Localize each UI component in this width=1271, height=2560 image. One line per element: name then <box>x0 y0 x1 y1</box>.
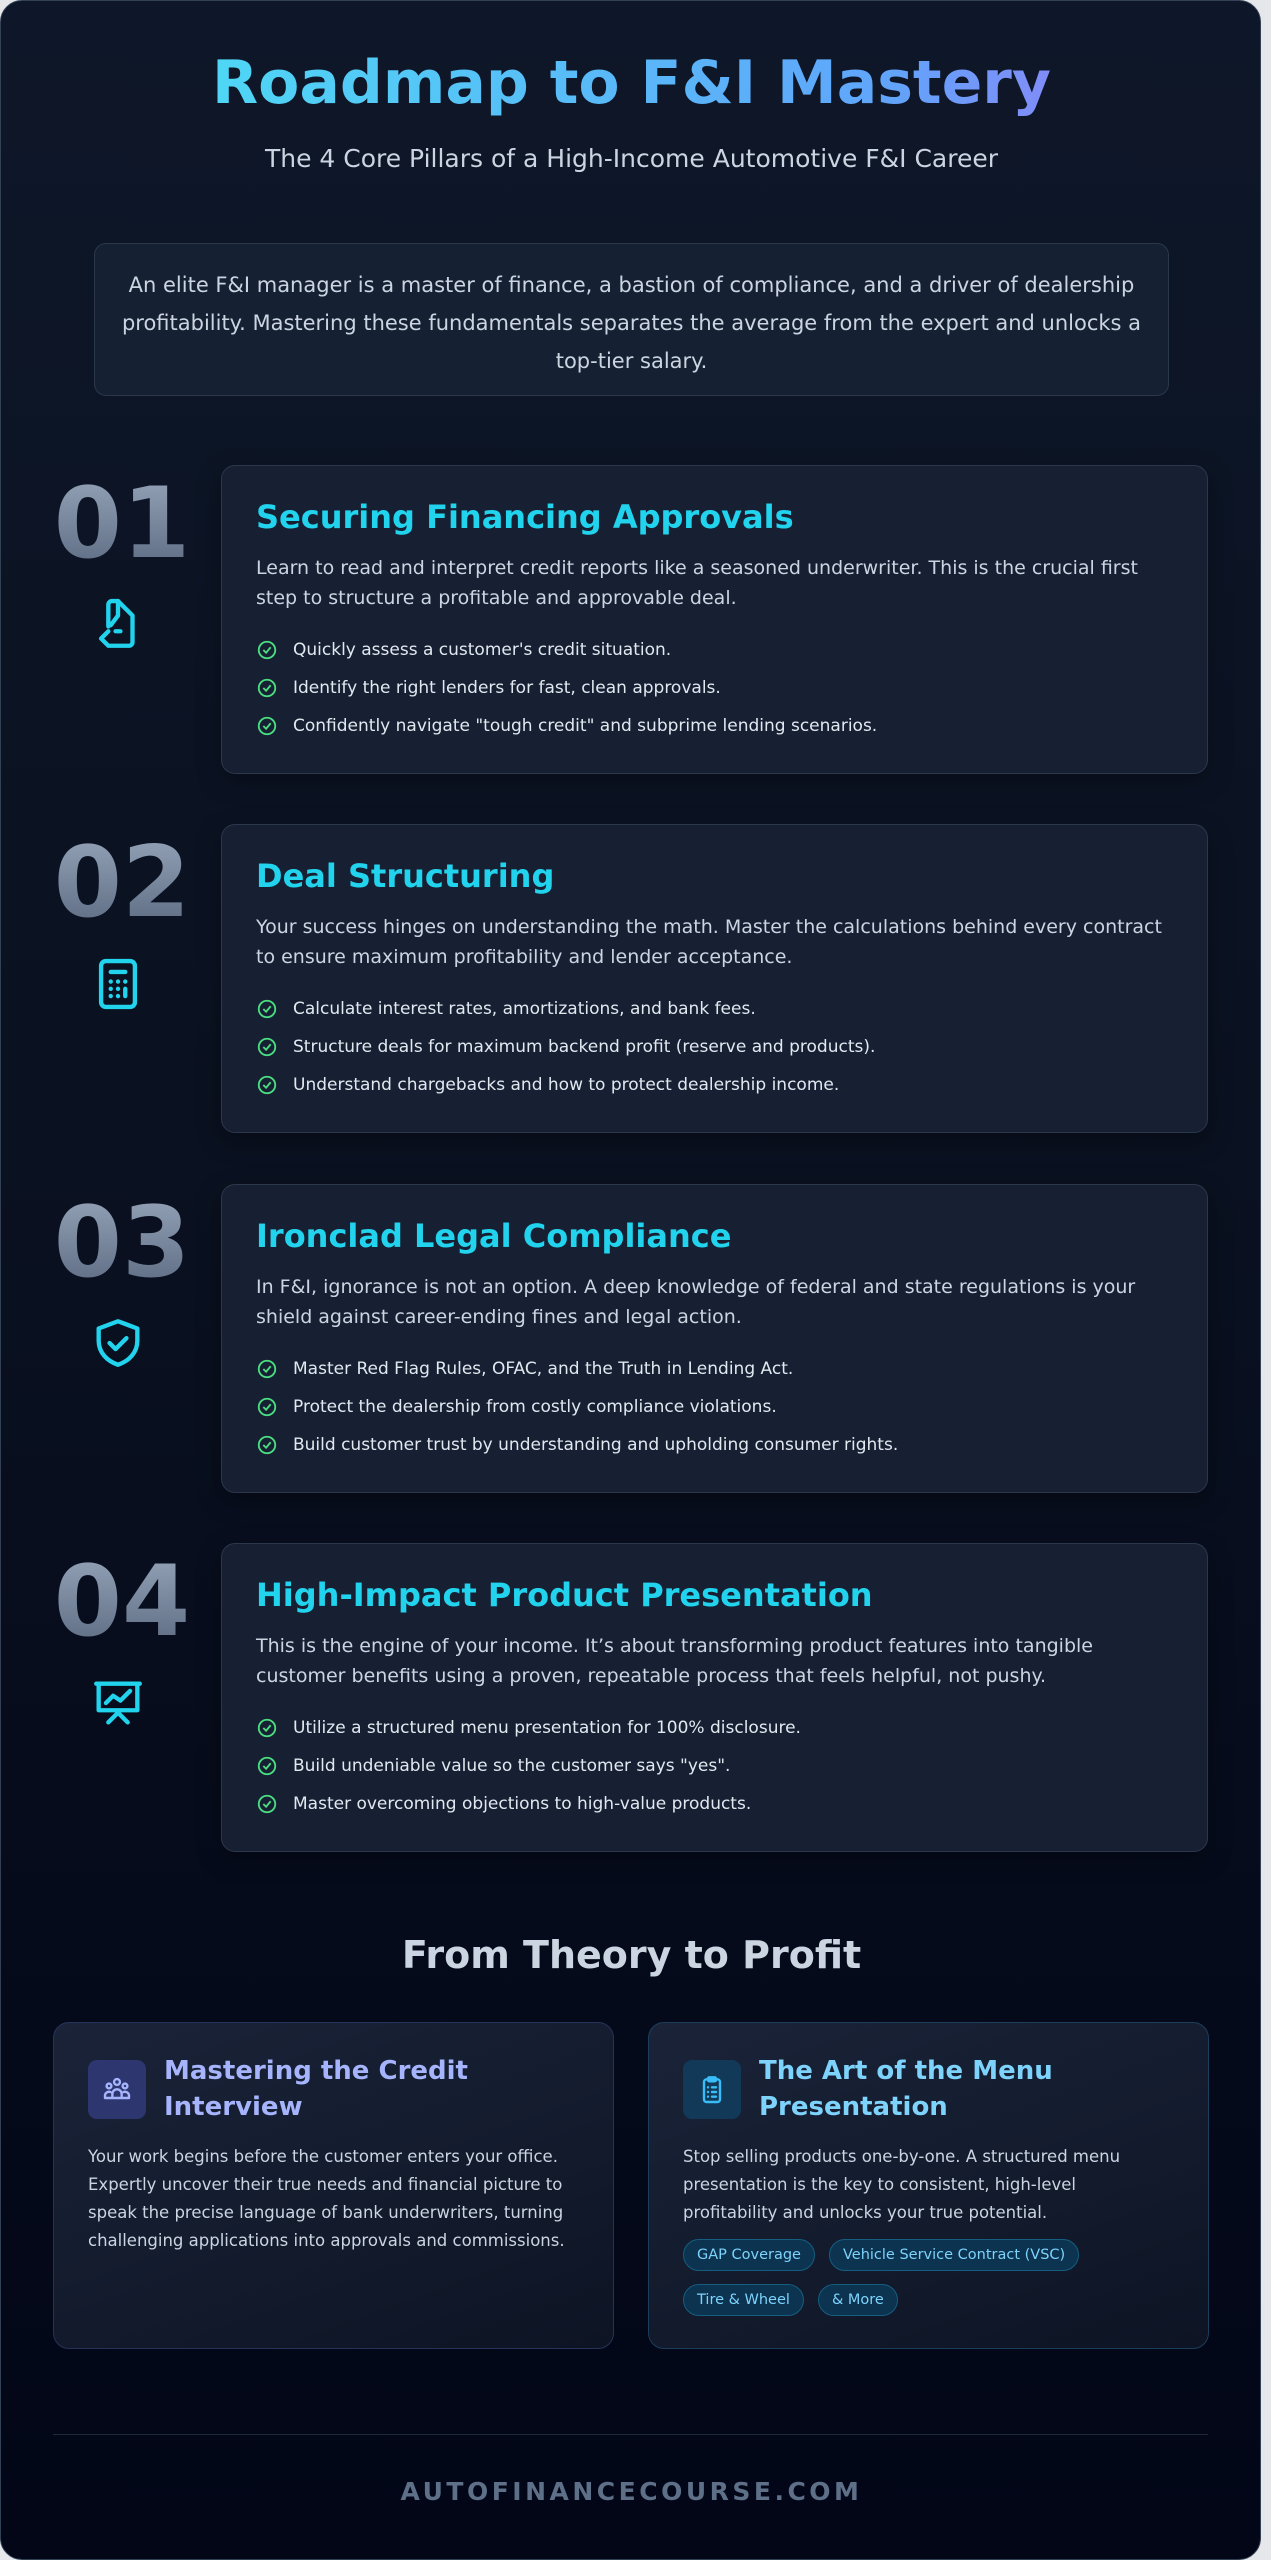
panel: high-impact product presentation: Utilize a structured menu presentation for 100% disclosure. <box>293 1718 801 1738</box>
footer: website: AUTOFINANCECOURSE.COM <box>401 2477 862 2506</box>
number 03: 03 <box>54 1186 190 1300</box>
panel: securing financing approvals: Learn to read and interpret credit reports like a seasoned underwriter. This is the crucial first step to structure a profitable and approvable deal. <box>256 557 1138 609</box>
panel: deal structuring: Structure deals for maximum backend profit (reserve and products). <box>293 1037 875 1057</box>
panel: securing financing approvals <box>221 465 1208 774</box>
panel: ironclad legal compliance: In F&I, ignorance is not an option. A deep knowledge of federal and state regulations is your shield against career-ending fines and legal action. <box>256 1276 1135 1328</box>
product tags: Tire & Wheel <box>697 2292 790 2308</box>
panel: ironclad legal compliance: Ironclad Legal Compliance <box>256 1217 731 1255</box>
number 01: 01 <box>54 467 190 581</box>
panel: high-impact product presentation: High-Impact Product Presentation <box>256 1576 873 1614</box>
panel: securing financing approvals: Securing Financing Approvals <box>256 498 794 536</box>
product tags: & More <box>832 2292 884 2308</box>
panel: mastering the credit interview: Mastering the Credit Interview <box>164 2056 468 2122</box>
panel: mastering the credit interview <box>53 2022 614 2349</box>
number 04: 04 <box>54 1545 190 1659</box>
title: Roadmap to F&I Mastery <box>212 48 1051 118</box>
panel: high-impact product presentation: This is the engine of your income. It’s about transforming product features into tangible customer benefits using a proven, repeatable process that feels helpful, not pushy. <box>256 1635 1093 1687</box>
panel: the art of the menu presentation: The Art of the Menu Presentation <box>759 2056 1053 2122</box>
panel: high-impact product presentation: Build undeniable value so the customer says "yes". <box>293 1756 730 1776</box>
icon: calculator <box>98 958 138 1010</box>
panel: ironclad legal compliance: Build customer trust by understanding and upholding consumer rights. <box>293 1435 898 1455</box>
panel: deal structuring: Deal Structuring <box>256 857 554 895</box>
panel: high-impact product presentation: Master overcoming objections to high-value products. <box>293 1794 751 1814</box>
subtitle: The 4 Core Pillars of a High-Income Automotive F&I Career <box>265 144 998 173</box>
panel: the art of the menu presentation: Stop selling products one-by-one. A structured menu presentation is the key to consistent, high-level profitability and unlocks your true potential. <box>683 2147 1120 2222</box>
panel: deal structuring: Calculate interest rates, amortizations, and bank fees. <box>293 999 756 1019</box>
icon: credit report hand <box>98 598 135 648</box>
intro text box: An elite F&I manager is a master of finance, a bastion of compliance, and a driver of dealership profitability. Mastering these fundamentals separates the average from the expert and unlocks a top-tier salary. <box>122 273 1141 373</box>
intro text box <box>94 243 1169 396</box>
panel: deal structuring <box>221 824 1208 1133</box>
number 02: 02 <box>54 826 190 940</box>
heading: from theory to profit: From Theory to Profit <box>402 1933 861 1977</box>
panel: ironclad legal compliance: Protect the dealership from costly compliance violations. <box>293 1397 777 1417</box>
panel: deal structuring: Your success hinges on understanding the math. Master the calculations behind every contract to ensure maximum profitability and lender acceptance. <box>256 916 1162 968</box>
icon: clipboard <box>683 2060 741 2119</box>
panel: deal structuring: Understand chargebacks and how to protect dealership income. <box>293 1075 839 1095</box>
icon: people group <box>88 2060 146 2119</box>
panel: high-impact product presentation <box>221 1543 1208 1852</box>
product tags: GAP Coverage <box>697 2247 801 2263</box>
product tags <box>683 2239 1079 2316</box>
panel: securing financing approvals: Identify the right lenders for fast, clean approvals. <box>293 678 721 698</box>
product tags: Vehicle Service Contract (VSC) <box>843 2247 1065 2263</box>
panel: securing financing approvals: Confidently navigate "tough credit" and subprime lending scenarios. <box>293 716 877 736</box>
icon: shield check <box>96 1319 140 1367</box>
panel: mastering the credit interview: Your work begins before the customer enters your office. Expertly uncover their true needs and financial picture to speak the precise language of bank underwriters, turning challenging applications into approvals and commissions. <box>88 2147 565 2250</box>
icon: presentation chart <box>94 1682 142 1724</box>
panel: ironclad legal compliance <box>221 1184 1208 1493</box>
panel: ironclad legal compliance: Master Red Flag Rules, OFAC, and the Truth in Lending Act. <box>293 1359 793 1379</box>
panel: the art of the menu presentation <box>648 2022 1209 2349</box>
panel: securing financing approvals: Quickly assess a customer's credit situation. <box>293 640 671 660</box>
